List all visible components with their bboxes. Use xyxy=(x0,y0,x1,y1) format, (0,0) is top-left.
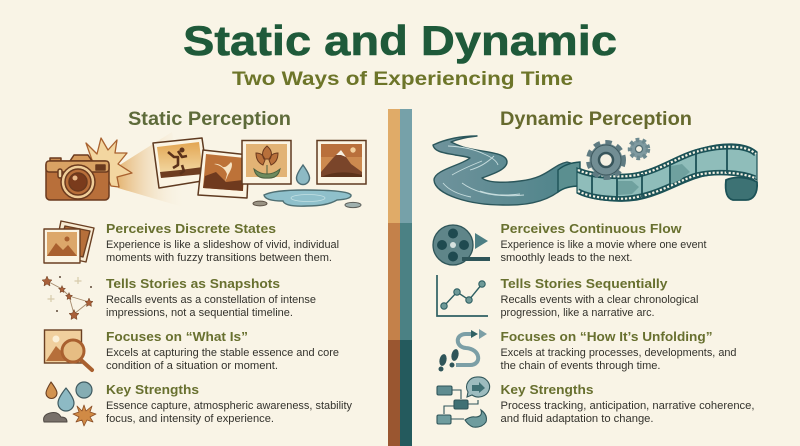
description: Experience is like a movie where one event xyxy=(500,239,707,251)
illustration: river, gears and film xyxy=(433,136,757,205)
description: Essence capture, atmospheric awareness, stability xyxy=(106,400,352,412)
heading: Perceives Continuous Flow xyxy=(500,221,682,236)
film roll curl xyxy=(726,178,757,200)
item: focuses on how it's unfolding xyxy=(438,329,736,372)
icon: line chart xyxy=(437,275,488,316)
description: impressions, not a sequential timeline. xyxy=(106,307,293,319)
heading: Key Strengths xyxy=(106,382,199,397)
photo: mountains xyxy=(317,140,366,184)
camera xyxy=(46,155,109,200)
description: the chain of events through time. xyxy=(500,360,660,372)
heading: Tells Stories Sequentially xyxy=(500,276,668,291)
icon: constellation xyxy=(42,276,93,320)
illustration: camera and snapshots xyxy=(46,132,366,208)
heading: Perceives Discrete States xyxy=(106,221,276,236)
description: and fluid adaptation to change. xyxy=(500,413,654,425)
icon: drops rock and burst xyxy=(44,382,96,426)
puddle xyxy=(253,190,361,208)
item: tells stories sequentially xyxy=(437,275,698,319)
description xyxy=(500,294,698,319)
water drop xyxy=(296,165,310,185)
heading: Focuses on “How It’s Unfolding” xyxy=(500,329,712,344)
description xyxy=(106,400,352,425)
icon: stacked photos xyxy=(44,221,94,263)
item: perceives discrete states xyxy=(44,221,339,264)
description xyxy=(500,400,754,425)
description: Recalls events as a constellation of intense xyxy=(106,294,316,306)
description: condition of a situation or moment. xyxy=(106,360,278,372)
heading: Focuses on “What Is” xyxy=(106,329,248,344)
subtitle: Two Ways of Experiencing Time xyxy=(232,68,573,90)
item: perceives continuous flow xyxy=(433,221,707,265)
description xyxy=(500,347,736,372)
heading: Tells Stories as Snapshots xyxy=(106,276,280,291)
title: Static and Dynamic xyxy=(183,17,617,64)
description: Recalls events with a clear chronological xyxy=(500,294,698,306)
film bridge xyxy=(558,162,580,192)
description: Experience is like a slideshow of vivid, individual xyxy=(106,239,339,251)
description: focus, and intensity of experience. xyxy=(106,413,274,425)
description: progression, like a narrative arc. xyxy=(500,307,654,319)
item: key strengths xyxy=(44,382,352,426)
small gear xyxy=(630,140,648,158)
photo: flower xyxy=(242,140,291,184)
icon: process flow xyxy=(437,377,490,427)
description xyxy=(106,294,316,319)
icon: footprints and winding arrow xyxy=(438,329,487,372)
heading: static perception: Static Perception xyxy=(128,108,291,130)
light beam xyxy=(115,132,186,208)
item: key strengths xyxy=(437,377,754,427)
river xyxy=(433,136,578,205)
description: moments with fuzzy transitions between them. xyxy=(106,252,332,264)
item: focuses on what is xyxy=(44,329,339,372)
description: Excels at tracking processes, developments, and xyxy=(500,347,736,359)
item: tells stories as snapshots xyxy=(42,276,316,320)
description xyxy=(500,239,707,264)
flash starburst xyxy=(86,138,132,187)
description: smoothly leads to the next. xyxy=(500,252,632,264)
description: Process tracking, anticipation, narrative coherence, xyxy=(500,400,754,412)
photo: jumping figure xyxy=(153,138,208,188)
description xyxy=(106,239,339,264)
heading: Key Strengths xyxy=(500,382,594,397)
icon: film reel xyxy=(433,225,490,265)
heading: dynamic perception: Dynamic Perception xyxy=(500,108,692,130)
center divider bar xyxy=(388,109,412,446)
panel: dynamic items xyxy=(433,221,754,427)
description: Excels at capturing the stable essence and core xyxy=(106,347,339,359)
description xyxy=(106,347,339,372)
large gear xyxy=(590,144,622,176)
photo: sunset figure xyxy=(198,150,249,198)
icon: magnifier over picture xyxy=(44,330,92,370)
film strip xyxy=(577,144,757,201)
panel: static items xyxy=(42,221,352,426)
